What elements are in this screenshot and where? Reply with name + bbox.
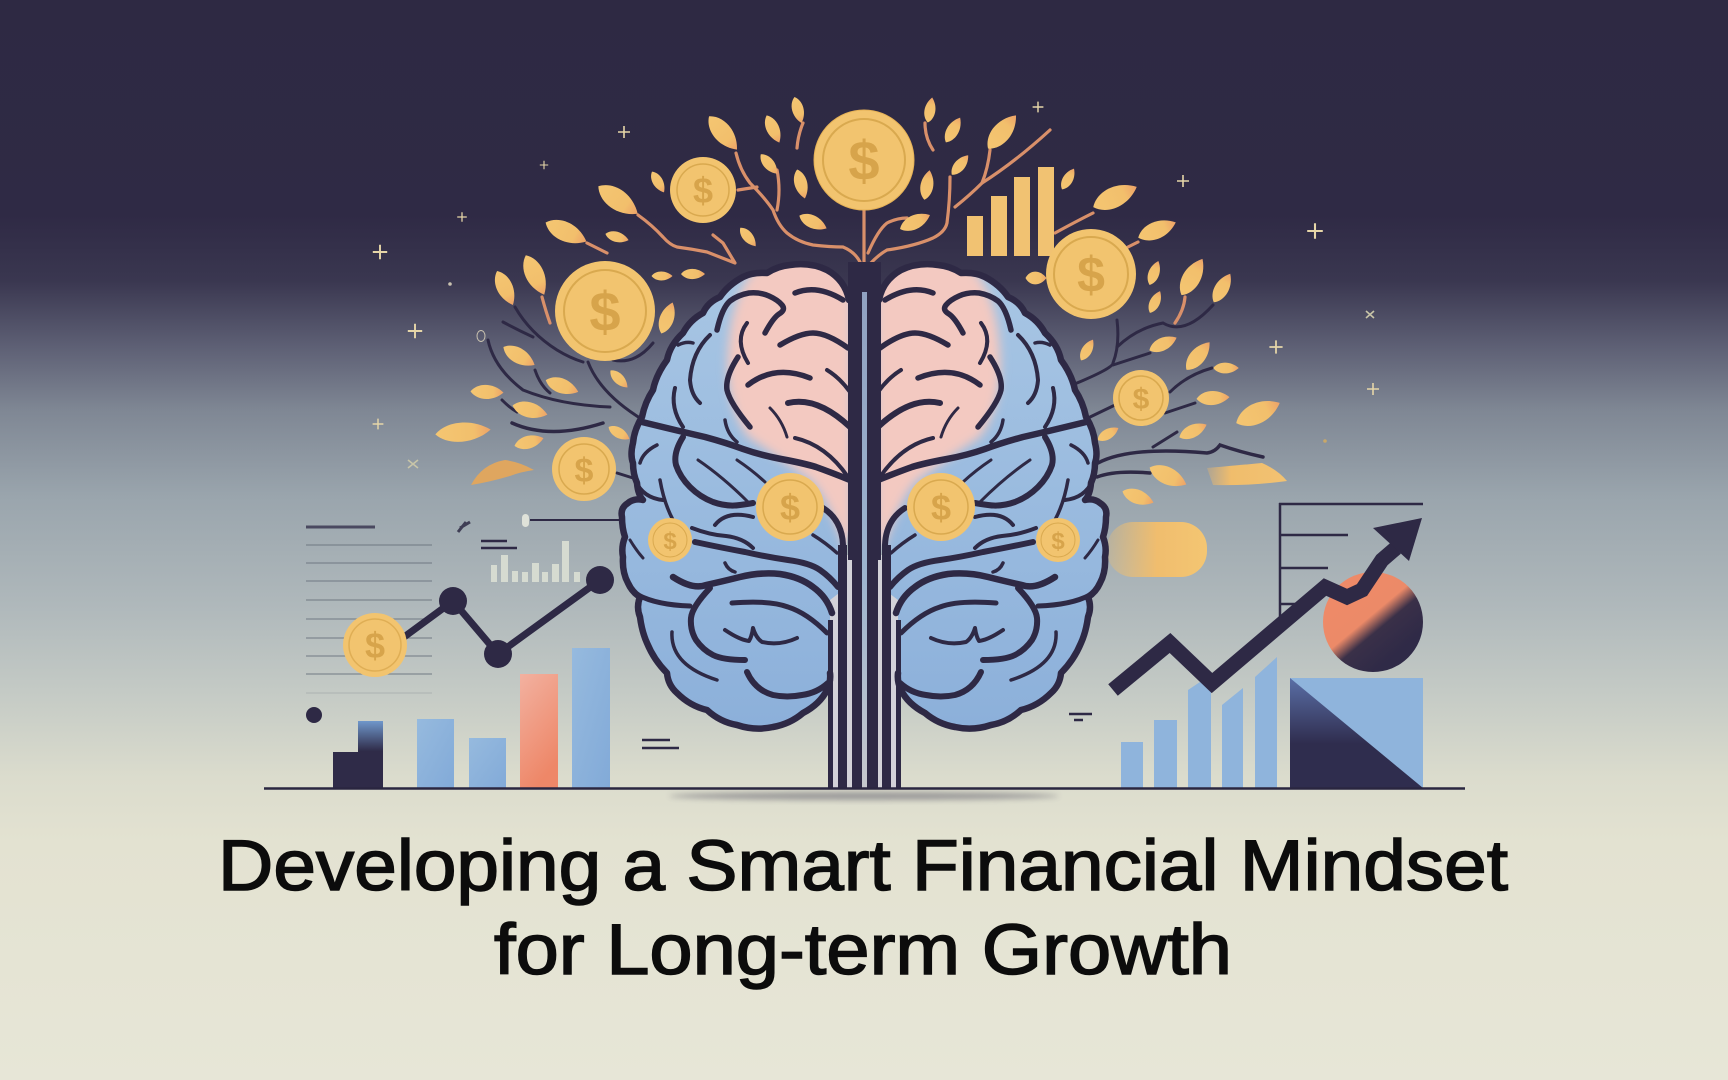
coin: brain centre right: $ xyxy=(931,487,951,528)
right chart: growth arrow xyxy=(1113,518,1422,690)
left chart: bars xyxy=(333,648,610,788)
right chart: square with triangle xyxy=(1290,678,1423,788)
orange tree branches xyxy=(542,123,1185,323)
title line 2: for Long-term Growth xyxy=(494,911,1232,990)
coin: left branch: $ xyxy=(575,452,594,490)
coin: large right: $ xyxy=(1077,247,1105,303)
coin: top centre xyxy=(814,110,914,210)
coin: right branch: $ xyxy=(1133,383,1150,416)
coin: large left xyxy=(555,261,655,361)
coin: left branch xyxy=(552,437,616,501)
coin: left chart: $ xyxy=(365,625,385,666)
coin: small right: $ xyxy=(1051,528,1065,555)
coin: large left: $ xyxy=(589,280,621,343)
left chart: small marks xyxy=(458,514,1092,748)
coin: brain centre right xyxy=(907,473,975,541)
right hemisphere (mirrored) xyxy=(876,255,1106,729)
right chart: frame lines xyxy=(1279,503,1423,620)
title xyxy=(218,827,1508,990)
gold bar chart in canopy xyxy=(967,167,1054,256)
right chart: orange sphere xyxy=(1323,572,1423,672)
blurred gold blobs xyxy=(471,460,1287,577)
trunk lines xyxy=(828,262,901,788)
left chart: dot xyxy=(306,707,322,723)
coin: left chart xyxy=(343,613,407,677)
coin: small left: $ xyxy=(663,528,677,555)
brain illustration xyxy=(622,255,1106,729)
coin: brain centre left xyxy=(756,473,824,541)
title line 1: Developing a Smart Financial Mindset xyxy=(218,827,1508,906)
coin: top centre: $ xyxy=(848,129,880,192)
leaves xyxy=(435,95,1284,509)
left hemisphere xyxy=(622,255,852,729)
coin: upper left xyxy=(670,157,736,223)
sparkle stars xyxy=(373,102,1379,468)
left chart: small grey bars xyxy=(491,541,580,582)
coin: right branch xyxy=(1113,370,1169,426)
dark tree branches xyxy=(488,305,1263,478)
left chart: trend line xyxy=(400,566,614,668)
ground line xyxy=(264,787,1465,790)
right chart: blue bars xyxy=(1121,657,1277,788)
coin: large right xyxy=(1046,229,1136,319)
coin: upper left: $ xyxy=(693,170,713,211)
ground shadow xyxy=(669,792,1059,800)
coin: small right xyxy=(1036,518,1080,562)
left chart: ruled lines xyxy=(306,527,432,693)
pale strip behind trunk xyxy=(828,555,901,788)
coin: small left xyxy=(648,518,692,562)
coin: brain centre left: $ xyxy=(780,487,800,528)
